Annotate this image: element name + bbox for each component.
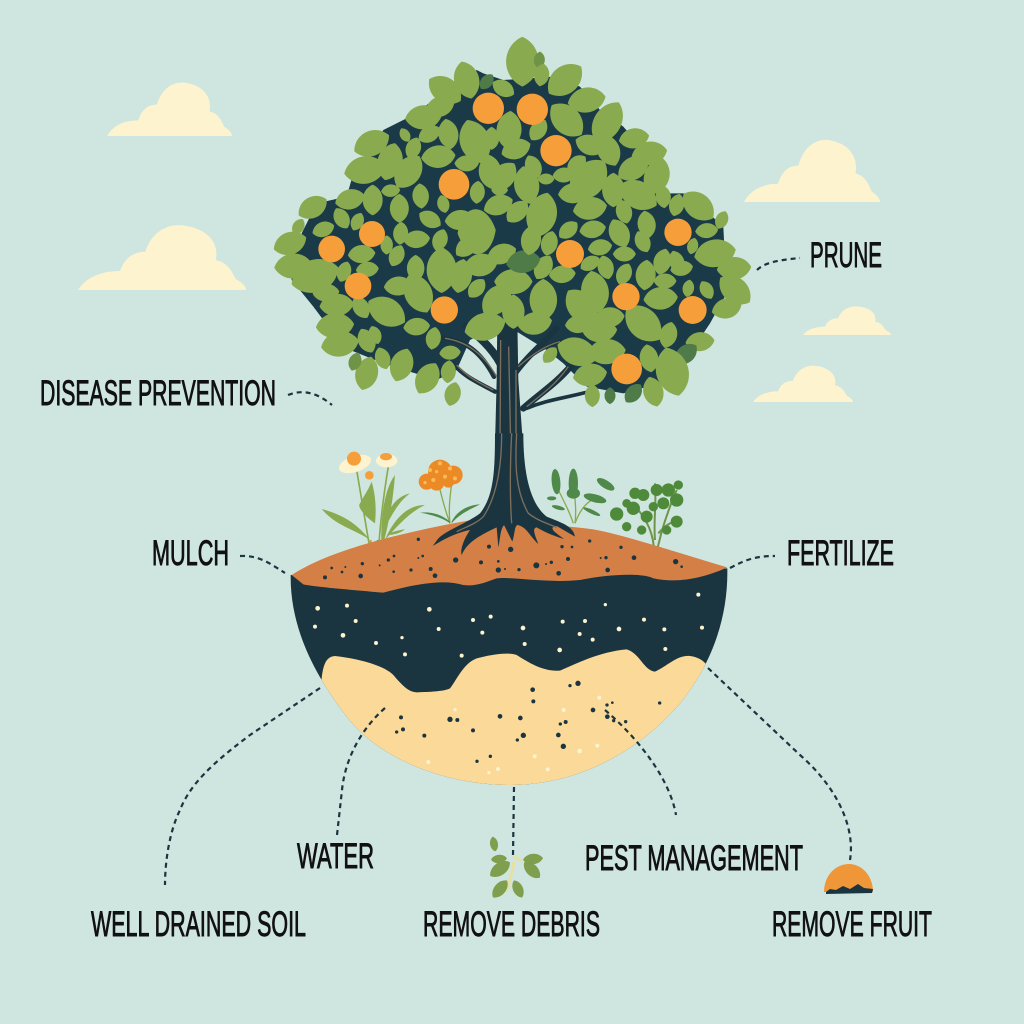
oranges [318, 93, 707, 384]
label: fertilize: FERTILIZE [787, 534, 894, 573]
label: water: WATER [297, 837, 374, 876]
callout lines [165, 258, 851, 885]
trunk and roots [433, 433, 575, 555]
canopy and branches [270, 37, 758, 445]
branches [443, 327, 585, 408]
tree [270, 37, 758, 445]
plant: marigold [419, 460, 480, 523]
label: mulch: MULCH [152, 534, 229, 573]
plant: broad leaves [547, 469, 616, 523]
icon: fallen fruit [824, 864, 873, 894]
label: disease prevention: DISEASE PREVENTION [40, 374, 276, 413]
label: remove debris: REMOVE DEBRIS [423, 905, 600, 944]
ground cross-section [291, 433, 730, 807]
bark lines [445, 338, 568, 445]
leaves [270, 37, 758, 409]
label: pest management: PEST MANAGEMENT [585, 839, 803, 878]
label: well drained soil: WELL DRAINED SOIL [91, 905, 306, 944]
dark soil layer [291, 568, 727, 785]
canopy shadow [290, 70, 727, 393]
plant: daisies [322, 451, 425, 553]
soil specks [323, 538, 683, 763]
clouds [78, 83, 891, 402]
sand layer [322, 649, 706, 785]
orange topsoil [292, 518, 727, 593]
icon: debris sprig [487, 836, 544, 901]
soil bowl [291, 518, 730, 807]
label: prune: PRUNE [810, 236, 882, 275]
upper trunk [495, 320, 523, 445]
plant: herb shrub [610, 480, 683, 557]
